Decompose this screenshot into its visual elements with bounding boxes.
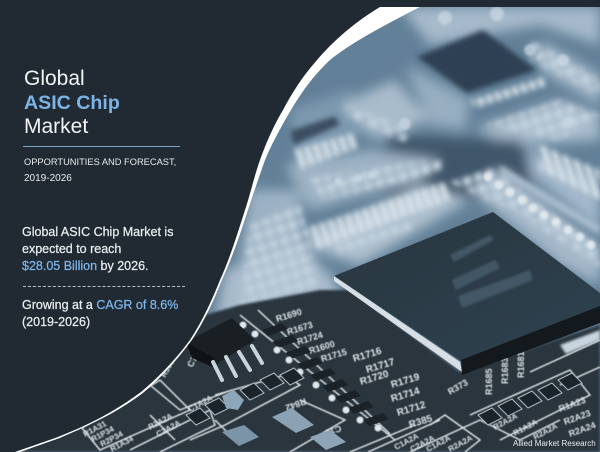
title: ASIC Chip xyxy=(24,92,120,114)
board silkscreen labels: R1724 xyxy=(296,330,324,347)
subtitle: OPPORTUNITIES AND FORECAST, xyxy=(24,157,176,167)
board silkscreen labels: R1715 xyxy=(320,347,348,364)
board silkscreen labels: R2A24 xyxy=(567,420,597,439)
small IC package xyxy=(186,318,262,380)
board silkscreen labels: R842 xyxy=(284,396,308,413)
subtitle xyxy=(24,157,176,184)
title divider xyxy=(23,146,180,147)
board silkscreen labels: R1673 xyxy=(286,320,314,337)
blurred background components xyxy=(215,7,600,320)
board silkscreen labels xyxy=(82,307,597,452)
board silkscreen labels: R1A23 xyxy=(557,395,587,414)
board silkscreen labels: R1712 xyxy=(396,400,427,419)
board silkscreen labels: R1719 xyxy=(390,372,421,391)
title xyxy=(24,67,120,138)
board silkscreen labels: R1683 xyxy=(500,357,510,384)
dashed divider xyxy=(23,286,185,287)
board silkscreen labels: R1716 xyxy=(352,346,383,365)
CAGR statement: Growing at a CAGR of 8.6% xyxy=(22,298,178,312)
board silkscreen labels: R1600 xyxy=(308,339,336,356)
resistor row xyxy=(240,322,389,432)
board silkscreen labels: C10 xyxy=(324,423,343,438)
board silkscreen labels: C1A2A xyxy=(393,431,420,452)
board silkscreen labels: R1714 xyxy=(390,386,421,405)
board silkscreen labels: R2A2A xyxy=(492,411,519,432)
CAGR statement xyxy=(22,298,178,329)
title: Market xyxy=(24,115,88,138)
lower right pads xyxy=(478,330,600,425)
board silkscreen labels: R1720 xyxy=(359,369,390,388)
board silkscreen labels: R373 xyxy=(446,377,470,397)
board silkscreen labels: R1690 xyxy=(275,307,303,324)
large ASIC chip xyxy=(334,212,600,375)
printed circuit board lower area xyxy=(20,212,600,452)
board silkscreen labels: R1A31 xyxy=(82,419,108,439)
board silkscreen labels: R2A23 xyxy=(562,408,592,427)
market size statement: expected to reach xyxy=(22,242,121,256)
subtitle: 2019-2026 xyxy=(24,173,72,184)
board silkscreen labels: C2A2A xyxy=(155,418,182,439)
title: Global xyxy=(24,67,85,90)
market size statement xyxy=(22,225,174,273)
board silkscreen labels: C1A2A xyxy=(187,393,214,414)
market size statement: $28.05 Billion by 2026. xyxy=(22,259,148,273)
board silkscreen labels: R305 xyxy=(159,357,177,379)
board silkscreen labels: R1685 xyxy=(484,368,494,395)
small capacitors row xyxy=(186,368,346,450)
board silkscreen labels: R2A2A xyxy=(147,411,174,432)
board silkscreen labels: R2A2A xyxy=(532,421,559,442)
board silkscreen labels: R1681 xyxy=(516,351,526,378)
board silkscreen labels: C710 xyxy=(185,345,204,369)
board silkscreen labels: R385 xyxy=(408,413,434,431)
CAGR statement: (2019-2026) xyxy=(22,315,90,329)
board silkscreen labels: R1A2A xyxy=(512,417,539,438)
board silkscreen labels: R1P34 xyxy=(90,424,116,444)
board silkscreen labels: R2P34 xyxy=(99,429,125,449)
board silkscreen labels: R1717 xyxy=(365,357,396,376)
source watermark: Allied Market Research xyxy=(513,439,596,448)
market size statement: Global ASIC Chip Market is xyxy=(22,225,173,239)
